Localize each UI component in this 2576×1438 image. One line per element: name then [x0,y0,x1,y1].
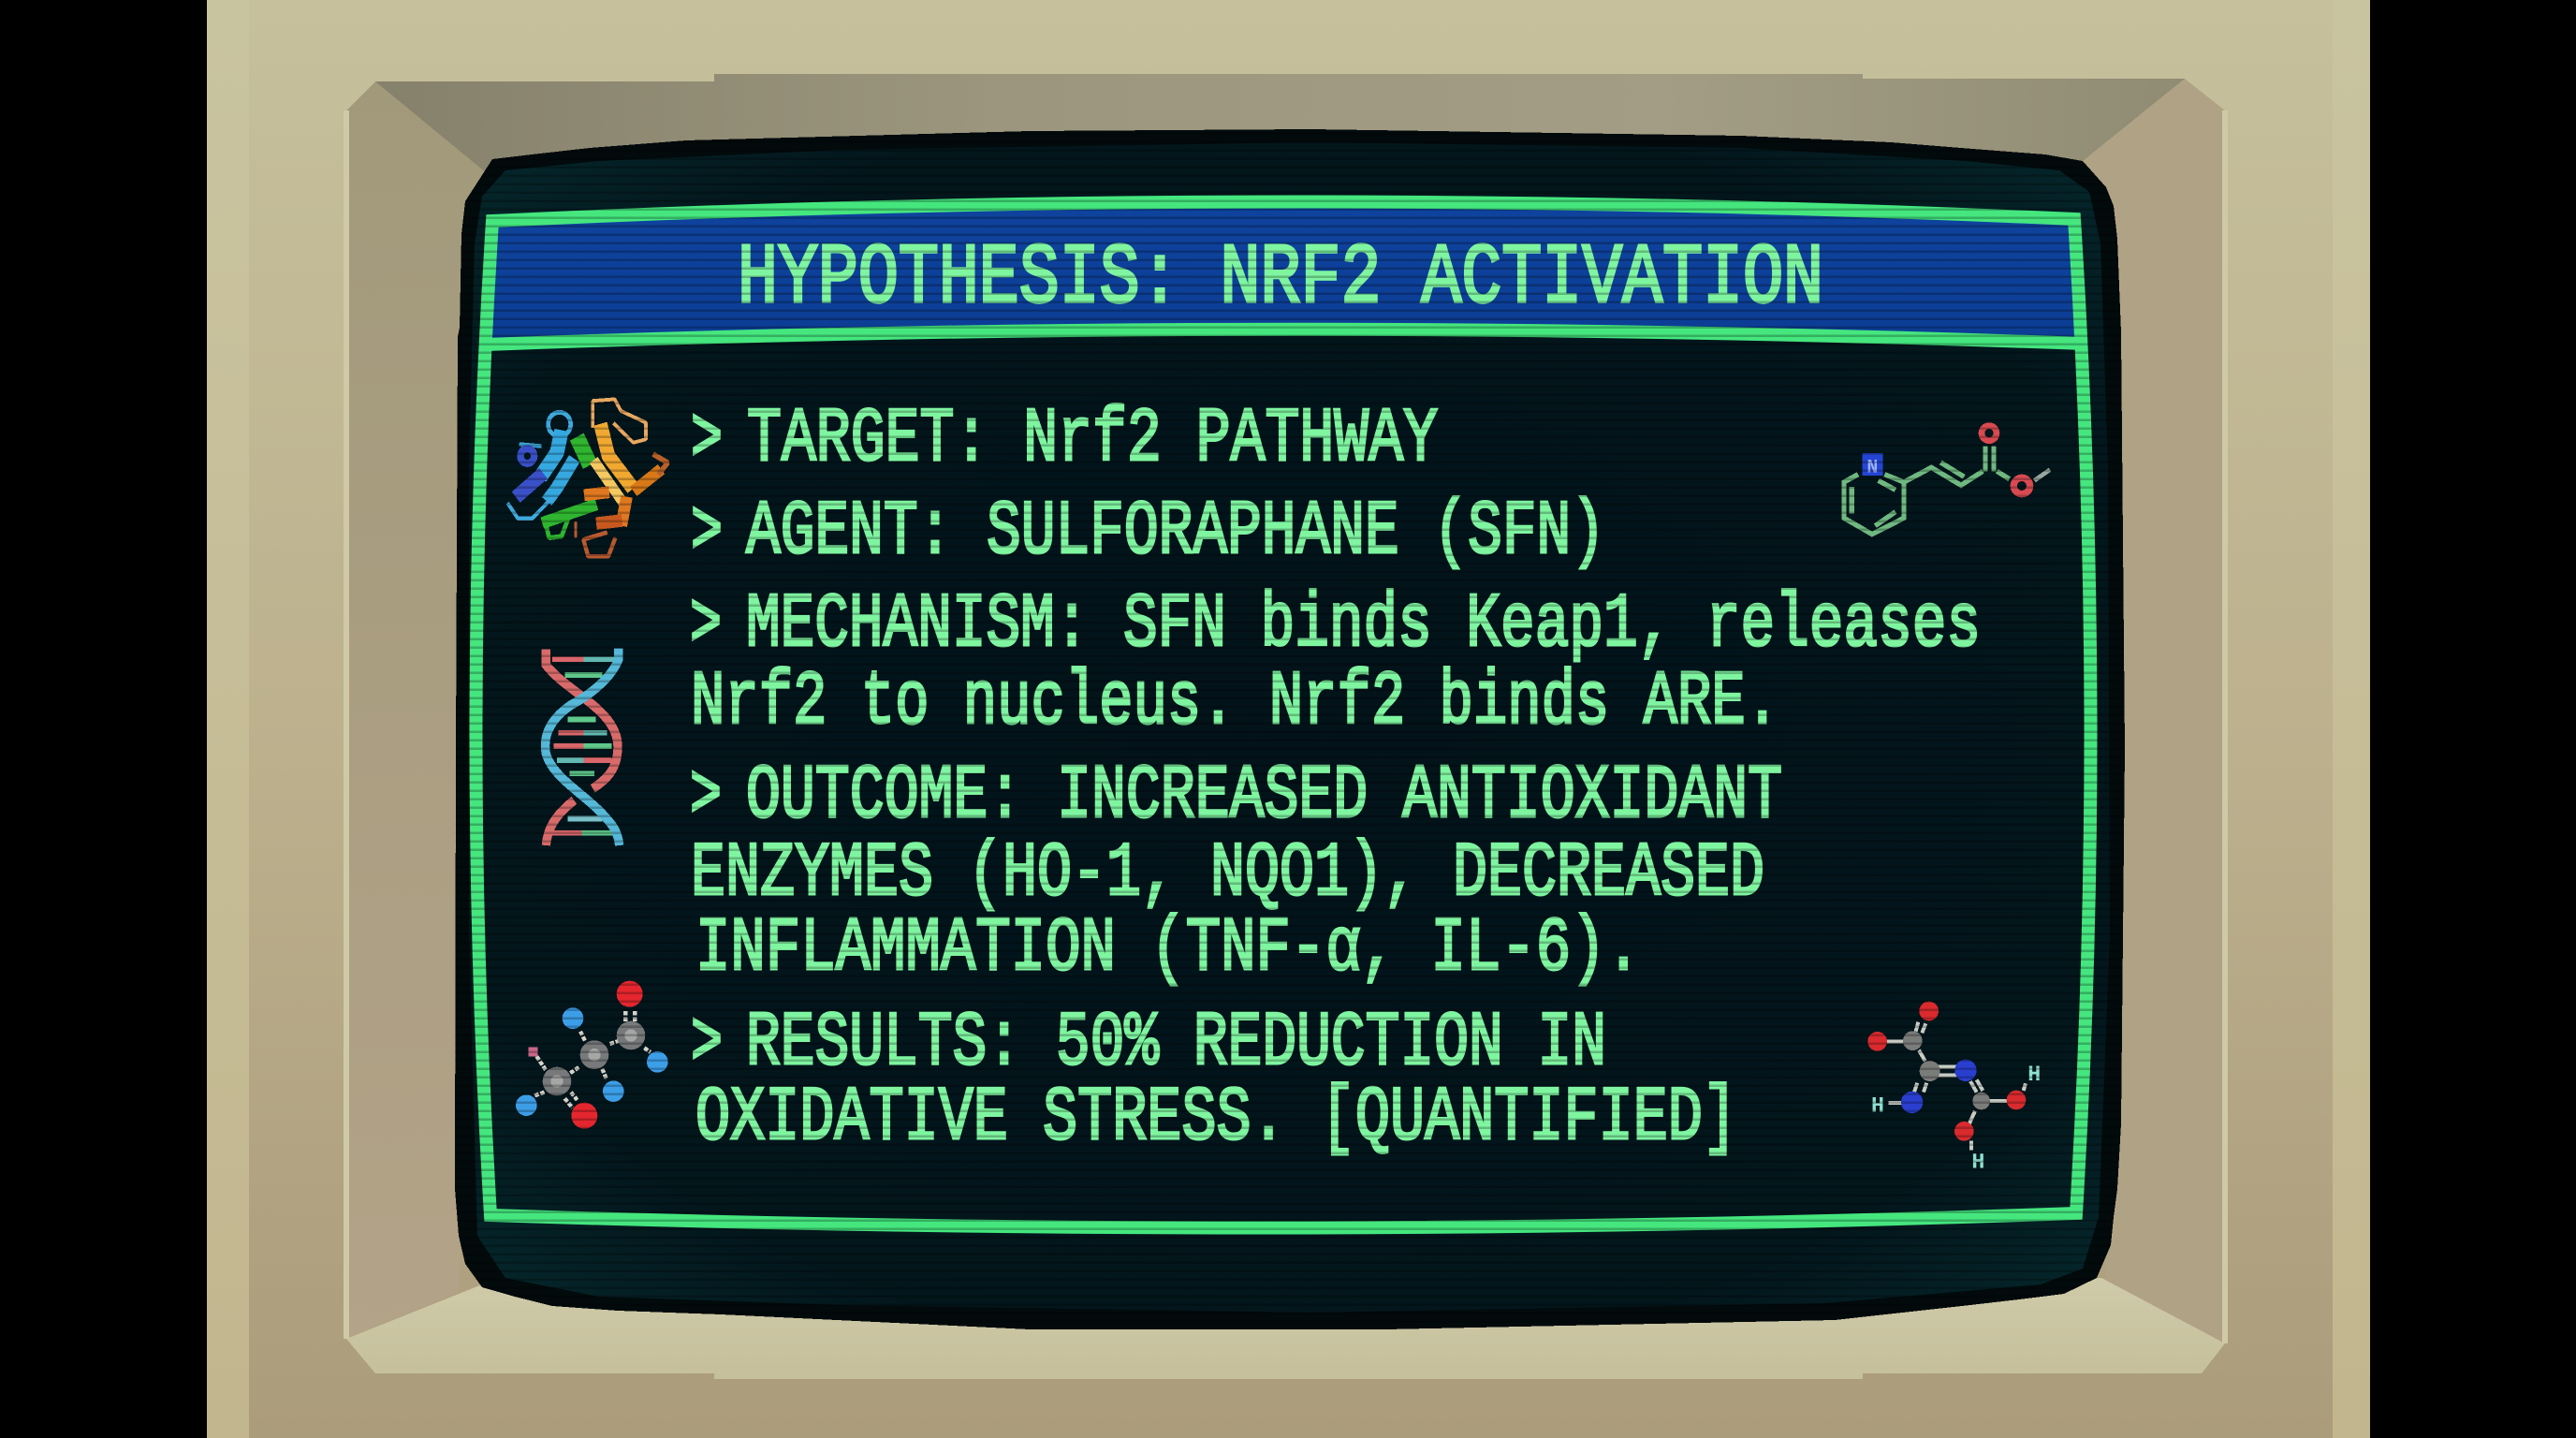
row: outcome: INFLAMMATION (TNF-α, IL-6). [695,905,1641,992]
row: outcome [690,753,1782,992]
scanlines [447,129,1196,1329]
icon: protein ribbon [508,399,667,556]
row: results: OXIDATIVE STRESS. [QUANTIFIED] [695,1075,1737,1162]
row: agent: > [691,489,723,576]
row: mechanism [690,581,1981,746]
bezel light edge [346,110,2225,1343]
hydrogen labels: H [1971,1151,1984,1175]
row: mechanism: > [690,581,722,668]
hydrogen labels [1871,1064,2041,1175]
icon: ball and stick molecule right [1867,1002,2041,1175]
row: outcome: OUTCOME: INCREASED ANTIOXIDANT [746,753,1782,840]
icon: ball and stick molecule left [516,981,668,1129]
bezel right face [2083,79,2225,1343]
list rows [690,396,1981,1162]
title: HYPOTHESIS: NRF2 ACTIVATION [738,231,1823,328]
icon: pyridine molecule [1844,426,2050,535]
row: results: > [691,1000,723,1087]
row: target: > [691,396,723,483]
hydrogen labels: H [1871,1094,1884,1119]
row: outcome: > [690,753,722,840]
row: outcome: ENZYMES (HO-1, NQO1), DECREASED [691,830,1764,917]
row: agent: AGENT: SULFORAPHANE (SFN) [746,489,1605,576]
row: results [691,1000,1737,1162]
bezel top face [346,74,2225,337]
row: mechanism: MECHANISM: SFN binds Keap1, releases [746,581,1981,668]
hydrogen labels: H [2027,1064,2041,1088]
header band [489,203,2080,350]
row: results: RESULTS: 50% REDUCTION IN [746,1000,1606,1087]
green frame [476,201,2091,1228]
row: target: TARGET: Nrf2 PATHWAY [747,396,1438,483]
recessed bezel [346,74,2225,1379]
icon: DNA helix [546,648,620,845]
row: mechanism: Nrf2 to nucleus. Nrf2 binds ARE. [691,659,1779,746]
CRT screen [455,129,2125,1329]
bezel bottom face [346,1278,2225,1379]
atom label: nitrogen: N [1866,457,1878,478]
bezel left face [346,81,492,1339]
